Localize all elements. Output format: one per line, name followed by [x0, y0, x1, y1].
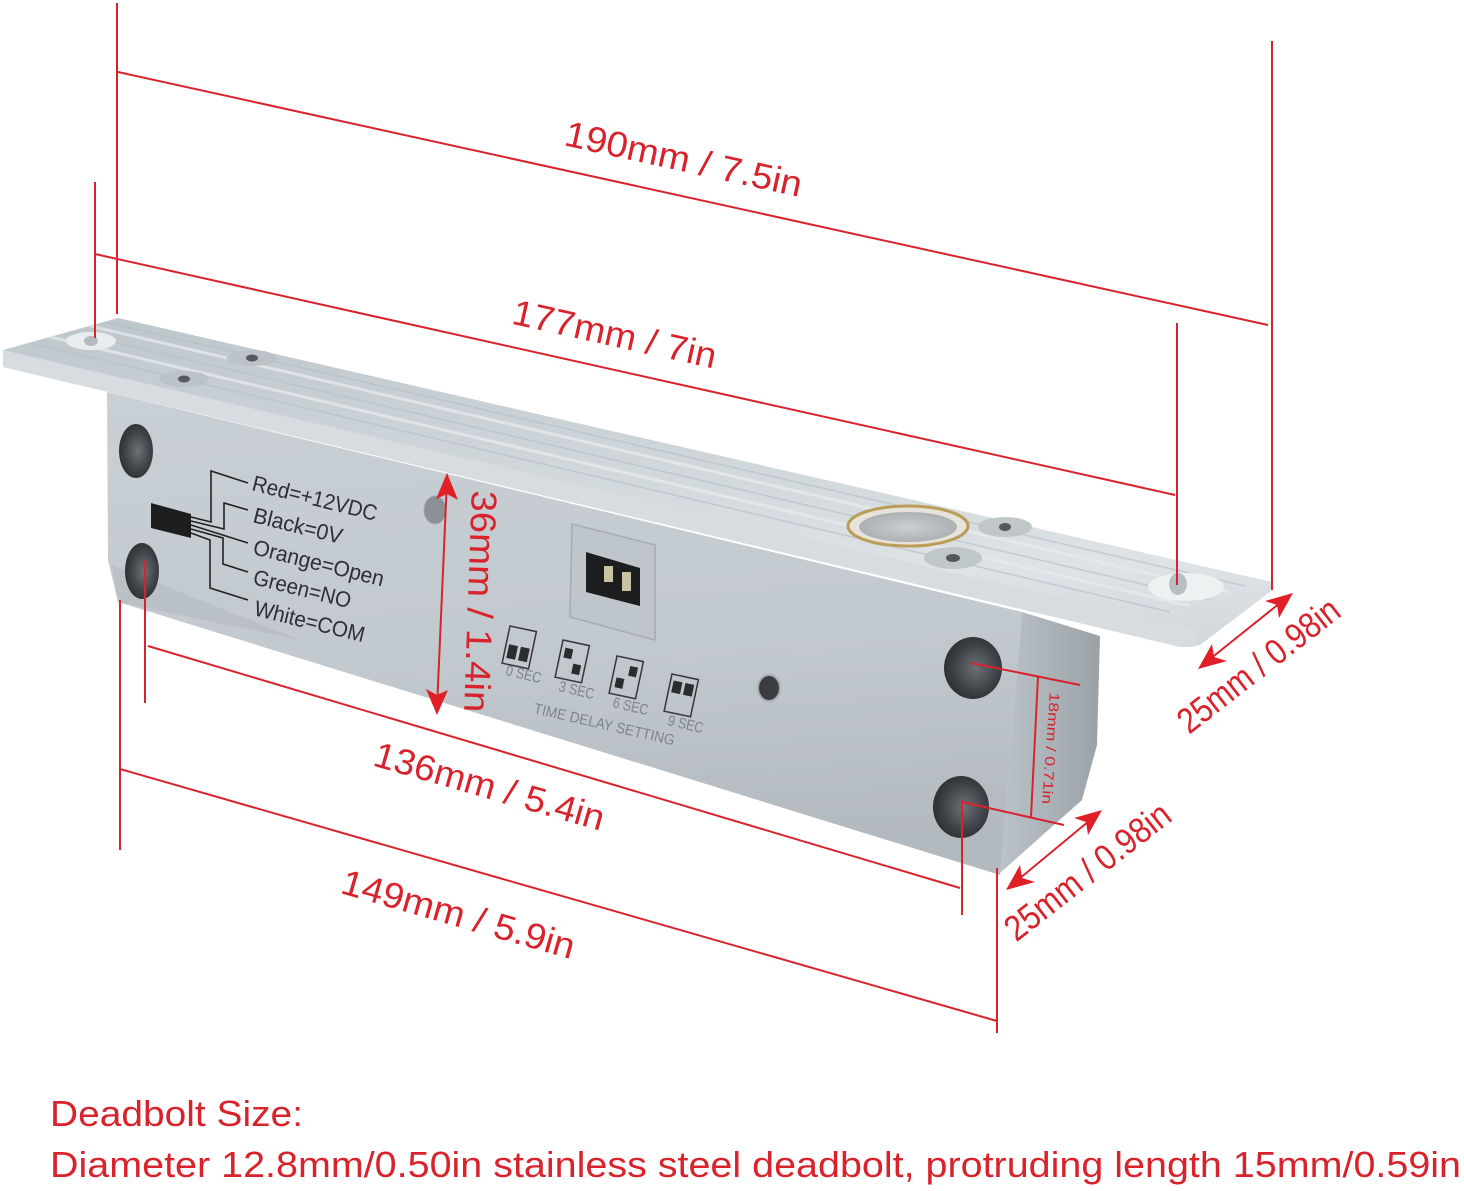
time delay settings: 9 SEC — [666, 712, 705, 737]
dimension: 149mm body length — [120, 600, 997, 1033]
time delay settings: 0 SEC — [504, 662, 543, 687]
dimension: 25mm plate width: 25mm / 0.98in — [1169, 589, 1348, 741]
3 sec switch — [555, 640, 589, 683]
LED indicator — [424, 496, 446, 524]
body side face — [1000, 612, 1100, 873]
wiring legend: White=COM — [252, 596, 367, 647]
time delay settings: TIME DELAY SETTING — [532, 700, 676, 749]
wiring legend: Red=+12VDC — [250, 471, 380, 526]
body screw holes — [119, 424, 1002, 838]
time delay settings — [502, 626, 705, 749]
wiring legend: Orange=Open — [251, 535, 387, 591]
connector recess — [570, 524, 655, 640]
deadbolt size note: Deadbolt Size: — [50, 1093, 303, 1134]
lock body — [3, 318, 1272, 875]
wiring legend: Green=NO — [251, 565, 354, 613]
0 sec switch — [502, 626, 536, 669]
time delay settings: 3 SEC — [557, 678, 596, 703]
dimension: 177mm hole spacing — [95, 182, 1177, 585]
body front face — [107, 392, 1022, 875]
deadbolt — [848, 506, 968, 546]
plate mounting holes — [66, 332, 1224, 601]
6 sec switch — [609, 656, 643, 699]
mounting plate — [3, 318, 1272, 647]
time delay settings: 6 SEC — [611, 694, 650, 719]
dimension: 18mm hole spacing: 18mm / 0.71in — [1039, 692, 1063, 805]
dimension: 190mm overall length: 190mm / 7.5in — [561, 113, 806, 205]
dimension: 36mm body height — [426, 473, 505, 715]
dimension: 136mm hole spacing: 136mm / 5.4in — [369, 733, 609, 838]
deadbolt size note: Diameter 12.8mm/0.50in stainless steel deadbolt, protruding length 15mm/0.59in — [50, 1144, 1461, 1185]
wiring legend: Black=0V — [251, 503, 345, 549]
dimension: 18mm hole spacing — [962, 663, 1080, 825]
dimension: 36mm body height: 36mm / 1.4in — [456, 490, 505, 713]
9 sec switch — [664, 674, 698, 717]
dimension: 149mm body length: 149mm / 5.9in — [337, 861, 580, 967]
deadbolt size note — [50, 1093, 1461, 1185]
plate screws — [159, 350, 1032, 569]
connector block — [151, 503, 191, 538]
dimension: 177mm hole spacing: 177mm / 7in — [509, 291, 721, 376]
dimension: 136mm hole spacing — [145, 560, 962, 915]
body small hole — [758, 675, 780, 701]
dimension: 25mm body width: 25mm / 0.98in — [996, 793, 1179, 949]
wiring legend — [151, 471, 387, 647]
